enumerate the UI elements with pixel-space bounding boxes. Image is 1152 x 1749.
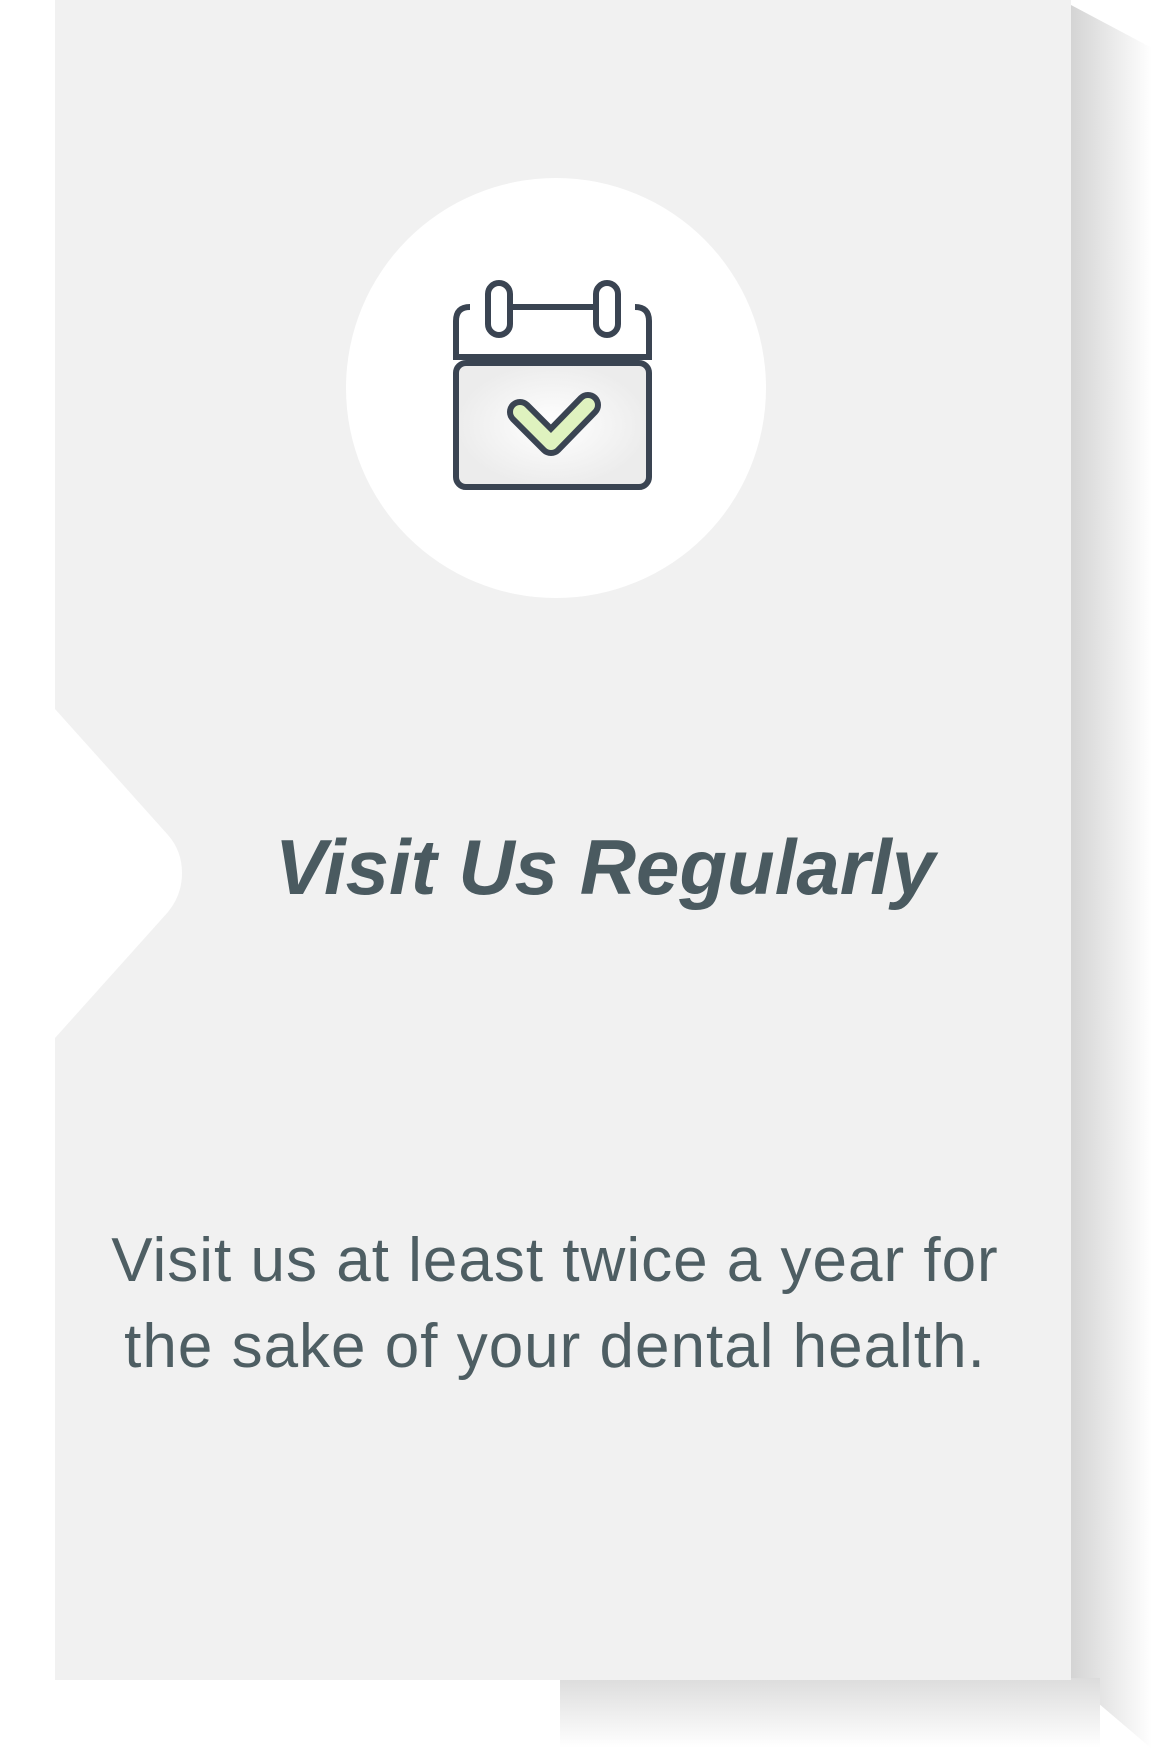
body text: Visit us at least twice a year for — [111, 1226, 999, 1295]
icon: calendar — [453, 280, 652, 490]
icon circle — [346, 178, 766, 598]
title: Visit Us Regularly — [275, 823, 935, 911]
body text — [111, 1226, 999, 1381]
body text: the sake of your dental health. — [124, 1312, 986, 1381]
